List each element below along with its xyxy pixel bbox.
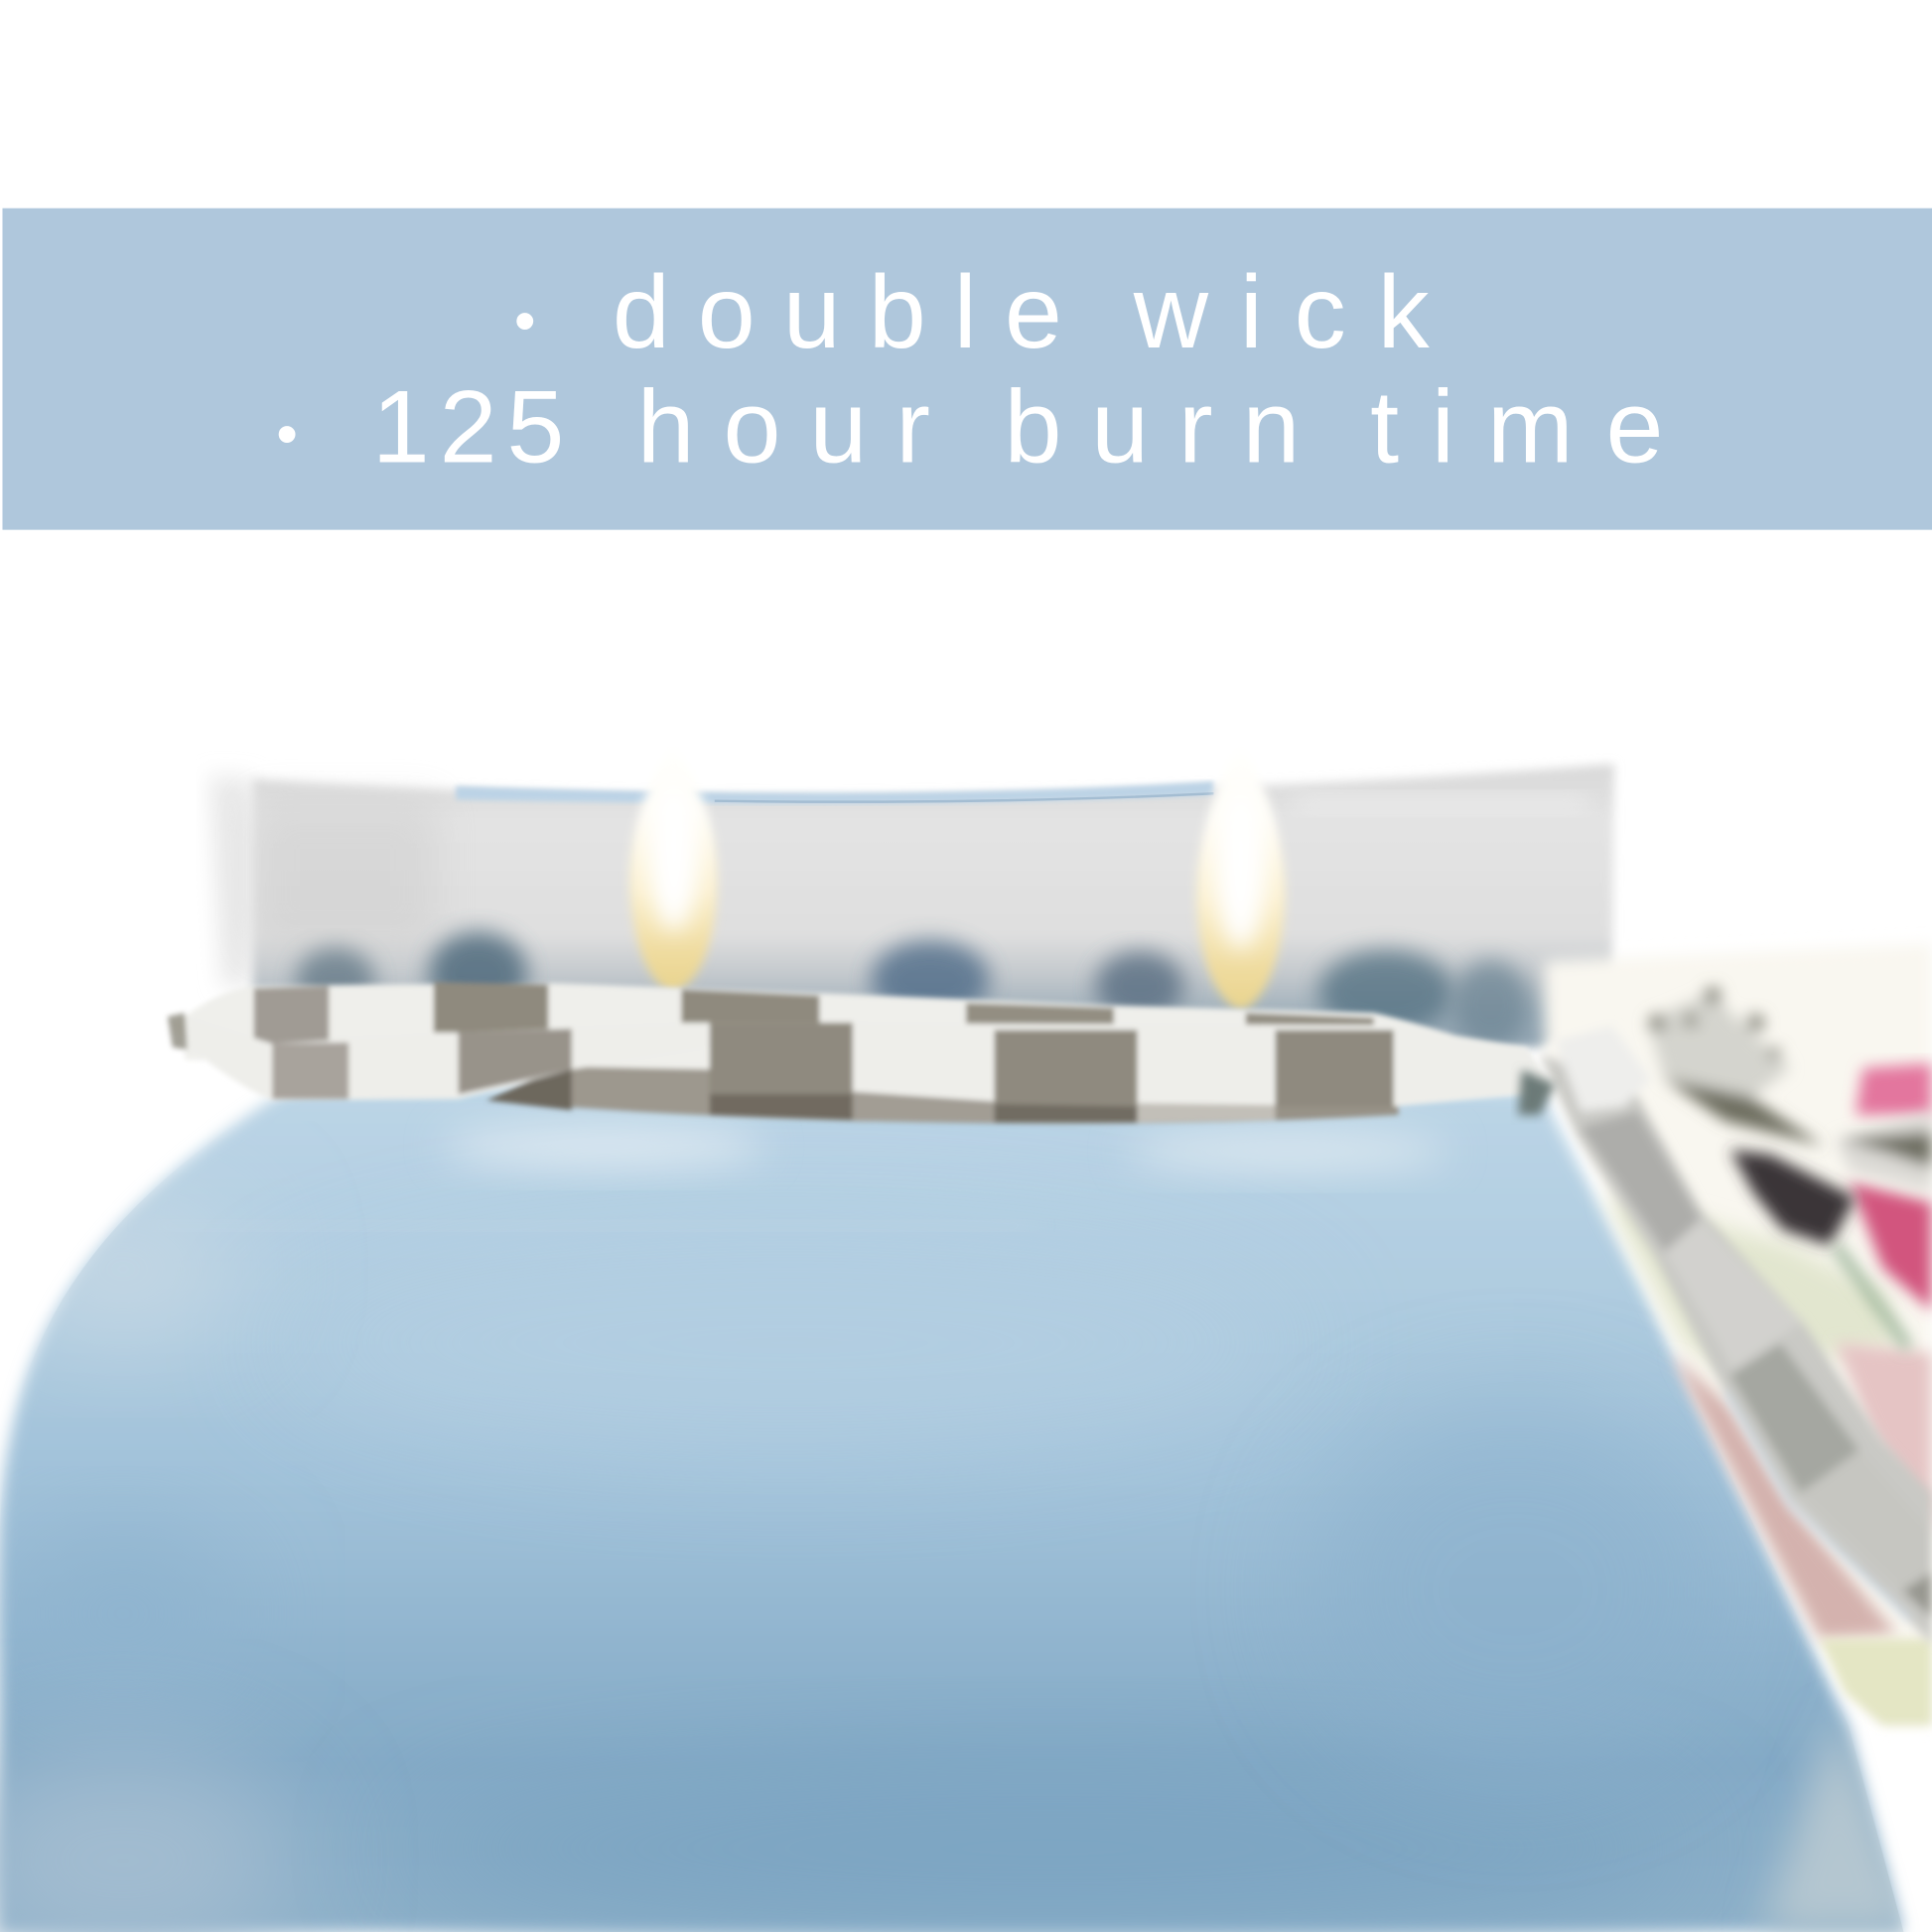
text: 125 hour burn time: burn bbox=[1004, 369, 1300, 484]
tag pink underside bbox=[1671, 1353, 1896, 1639]
back loop bbox=[486, 1044, 1399, 1124]
gingham ribbon around neck bbox=[168, 982, 1555, 1124]
tag dark pink flower bbox=[1850, 1181, 1932, 1311]
text: 125 hour burn time: time bbox=[1370, 369, 1663, 484]
text: 125 hour burn time: 125 bbox=[372, 369, 564, 484]
text: 125 hour burn time: hour bbox=[637, 369, 930, 484]
glass rim bbox=[209, 763, 1614, 1048]
text: double wick: wick bbox=[1133, 255, 1431, 370]
ribbon knot bbox=[1518, 1069, 1555, 1115]
tag cream paper bbox=[1545, 944, 1932, 1725]
draped ribbon tail bbox=[1540, 1026, 1932, 1645]
tag yellow corner bbox=[1820, 1639, 1932, 1725]
tag hot pink top bbox=[1856, 1063, 1932, 1115]
lavender sprig top bbox=[1647, 987, 1824, 1146]
hang tag bbox=[1518, 944, 1932, 1725]
tag pale green area bbox=[1604, 1192, 1897, 1368]
tag pale pink print bbox=[1836, 1343, 1932, 1534]
candle jar photo bbox=[0, 740, 1932, 1932]
text: double wick: double bbox=[613, 255, 1062, 370]
banner background bbox=[2, 208, 1932, 530]
jar body: blue wax bbox=[0, 1084, 1922, 1932]
bow ribbon bbox=[1836, 1111, 1932, 1192]
lavender dark buds bbox=[1729, 1150, 1856, 1246]
lower band bbox=[168, 1013, 1555, 1106]
flame: left wick bbox=[629, 740, 717, 992]
banner bbox=[2, 208, 1932, 530]
green stem bbox=[1836, 1246, 1908, 1348]
upper band bbox=[185, 982, 1528, 1084]
flame: right wick bbox=[1196, 740, 1285, 1011]
bullet: burn time: • bbox=[276, 400, 298, 469]
bullet: double wick: • bbox=[514, 287, 536, 355]
